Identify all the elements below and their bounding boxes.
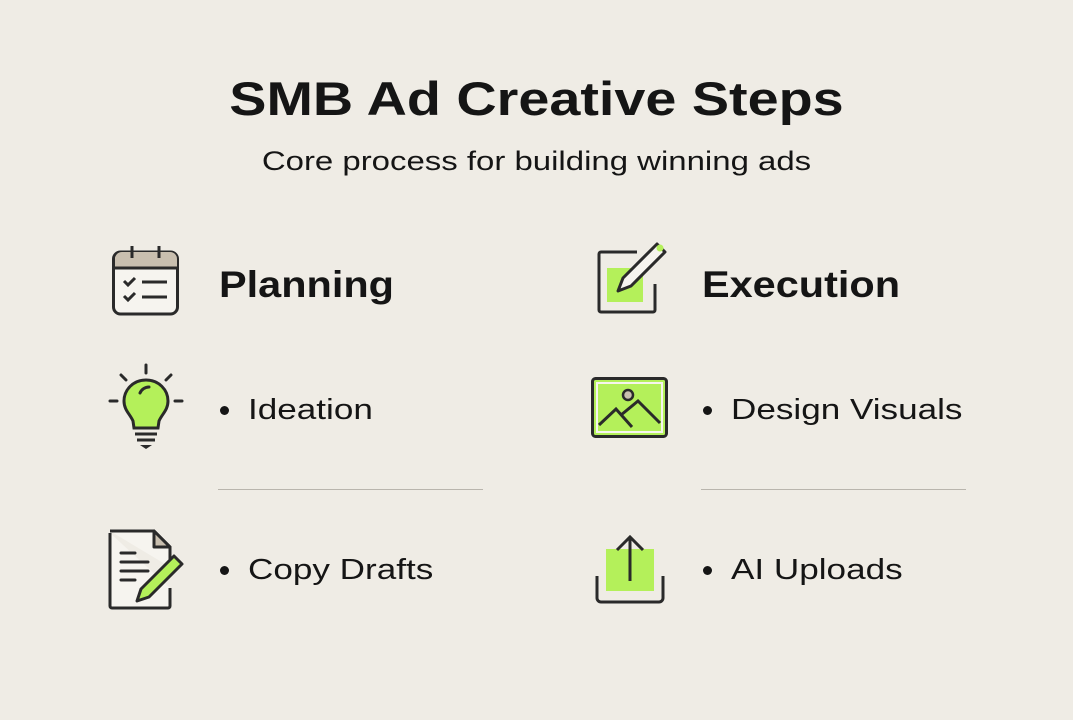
icon: document with pen [108,529,184,610]
icon: upload [596,535,664,604]
subtitle: Core process for building winning ads [262,146,811,176]
bullet: Copy Drafts: Copy Drafts [248,554,433,586]
title: SMB Ad Creative Steps [229,72,844,125]
bullet: AI Uploads: AI Uploads [731,554,903,586]
bullet: Design Visuals: Design Visuals [731,394,962,426]
bullet: Ideation: Ideation [248,394,373,426]
icon: calendar [112,246,179,316]
icon: lightbulb [108,364,184,449]
icon: edit square [598,242,667,314]
heading: Execution: Execution [702,264,900,305]
icon: image [591,377,668,438]
heading: Planning: Planning [219,264,394,305]
panel: execution [591,242,962,604]
panel: planning [108,246,433,610]
